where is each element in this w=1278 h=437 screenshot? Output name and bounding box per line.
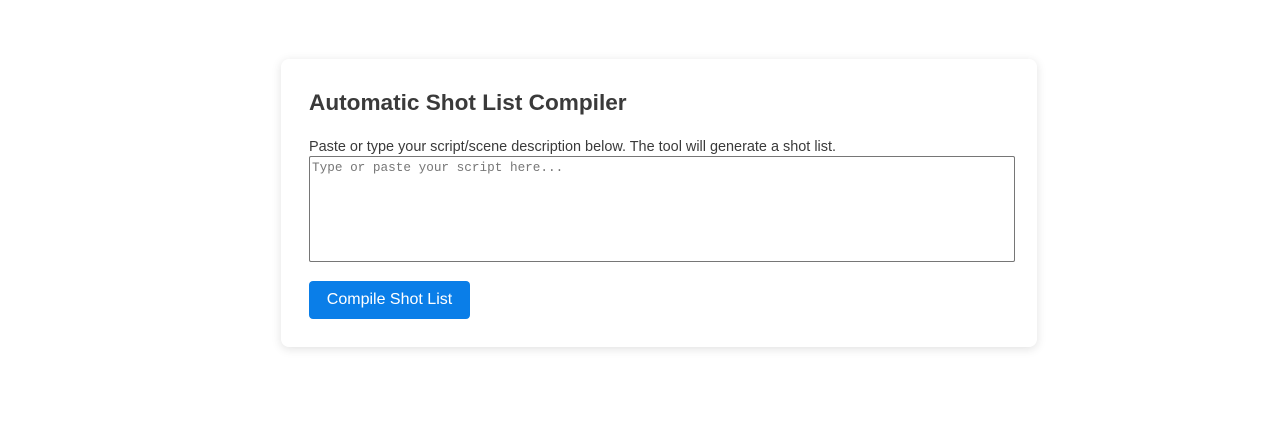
textarea: Type or paste your script here... (312, 160, 563, 175)
button: Compile Shot List (327, 291, 452, 308)
textarea (309, 156, 1015, 262)
panel: compiler card (281, 59, 1037, 347)
instruction text: Paste or type your script/scene description below. The tool will generate a shot list. (309, 139, 836, 155)
button (309, 281, 470, 319)
title: Automatic Shot List Compiler (309, 90, 627, 115)
